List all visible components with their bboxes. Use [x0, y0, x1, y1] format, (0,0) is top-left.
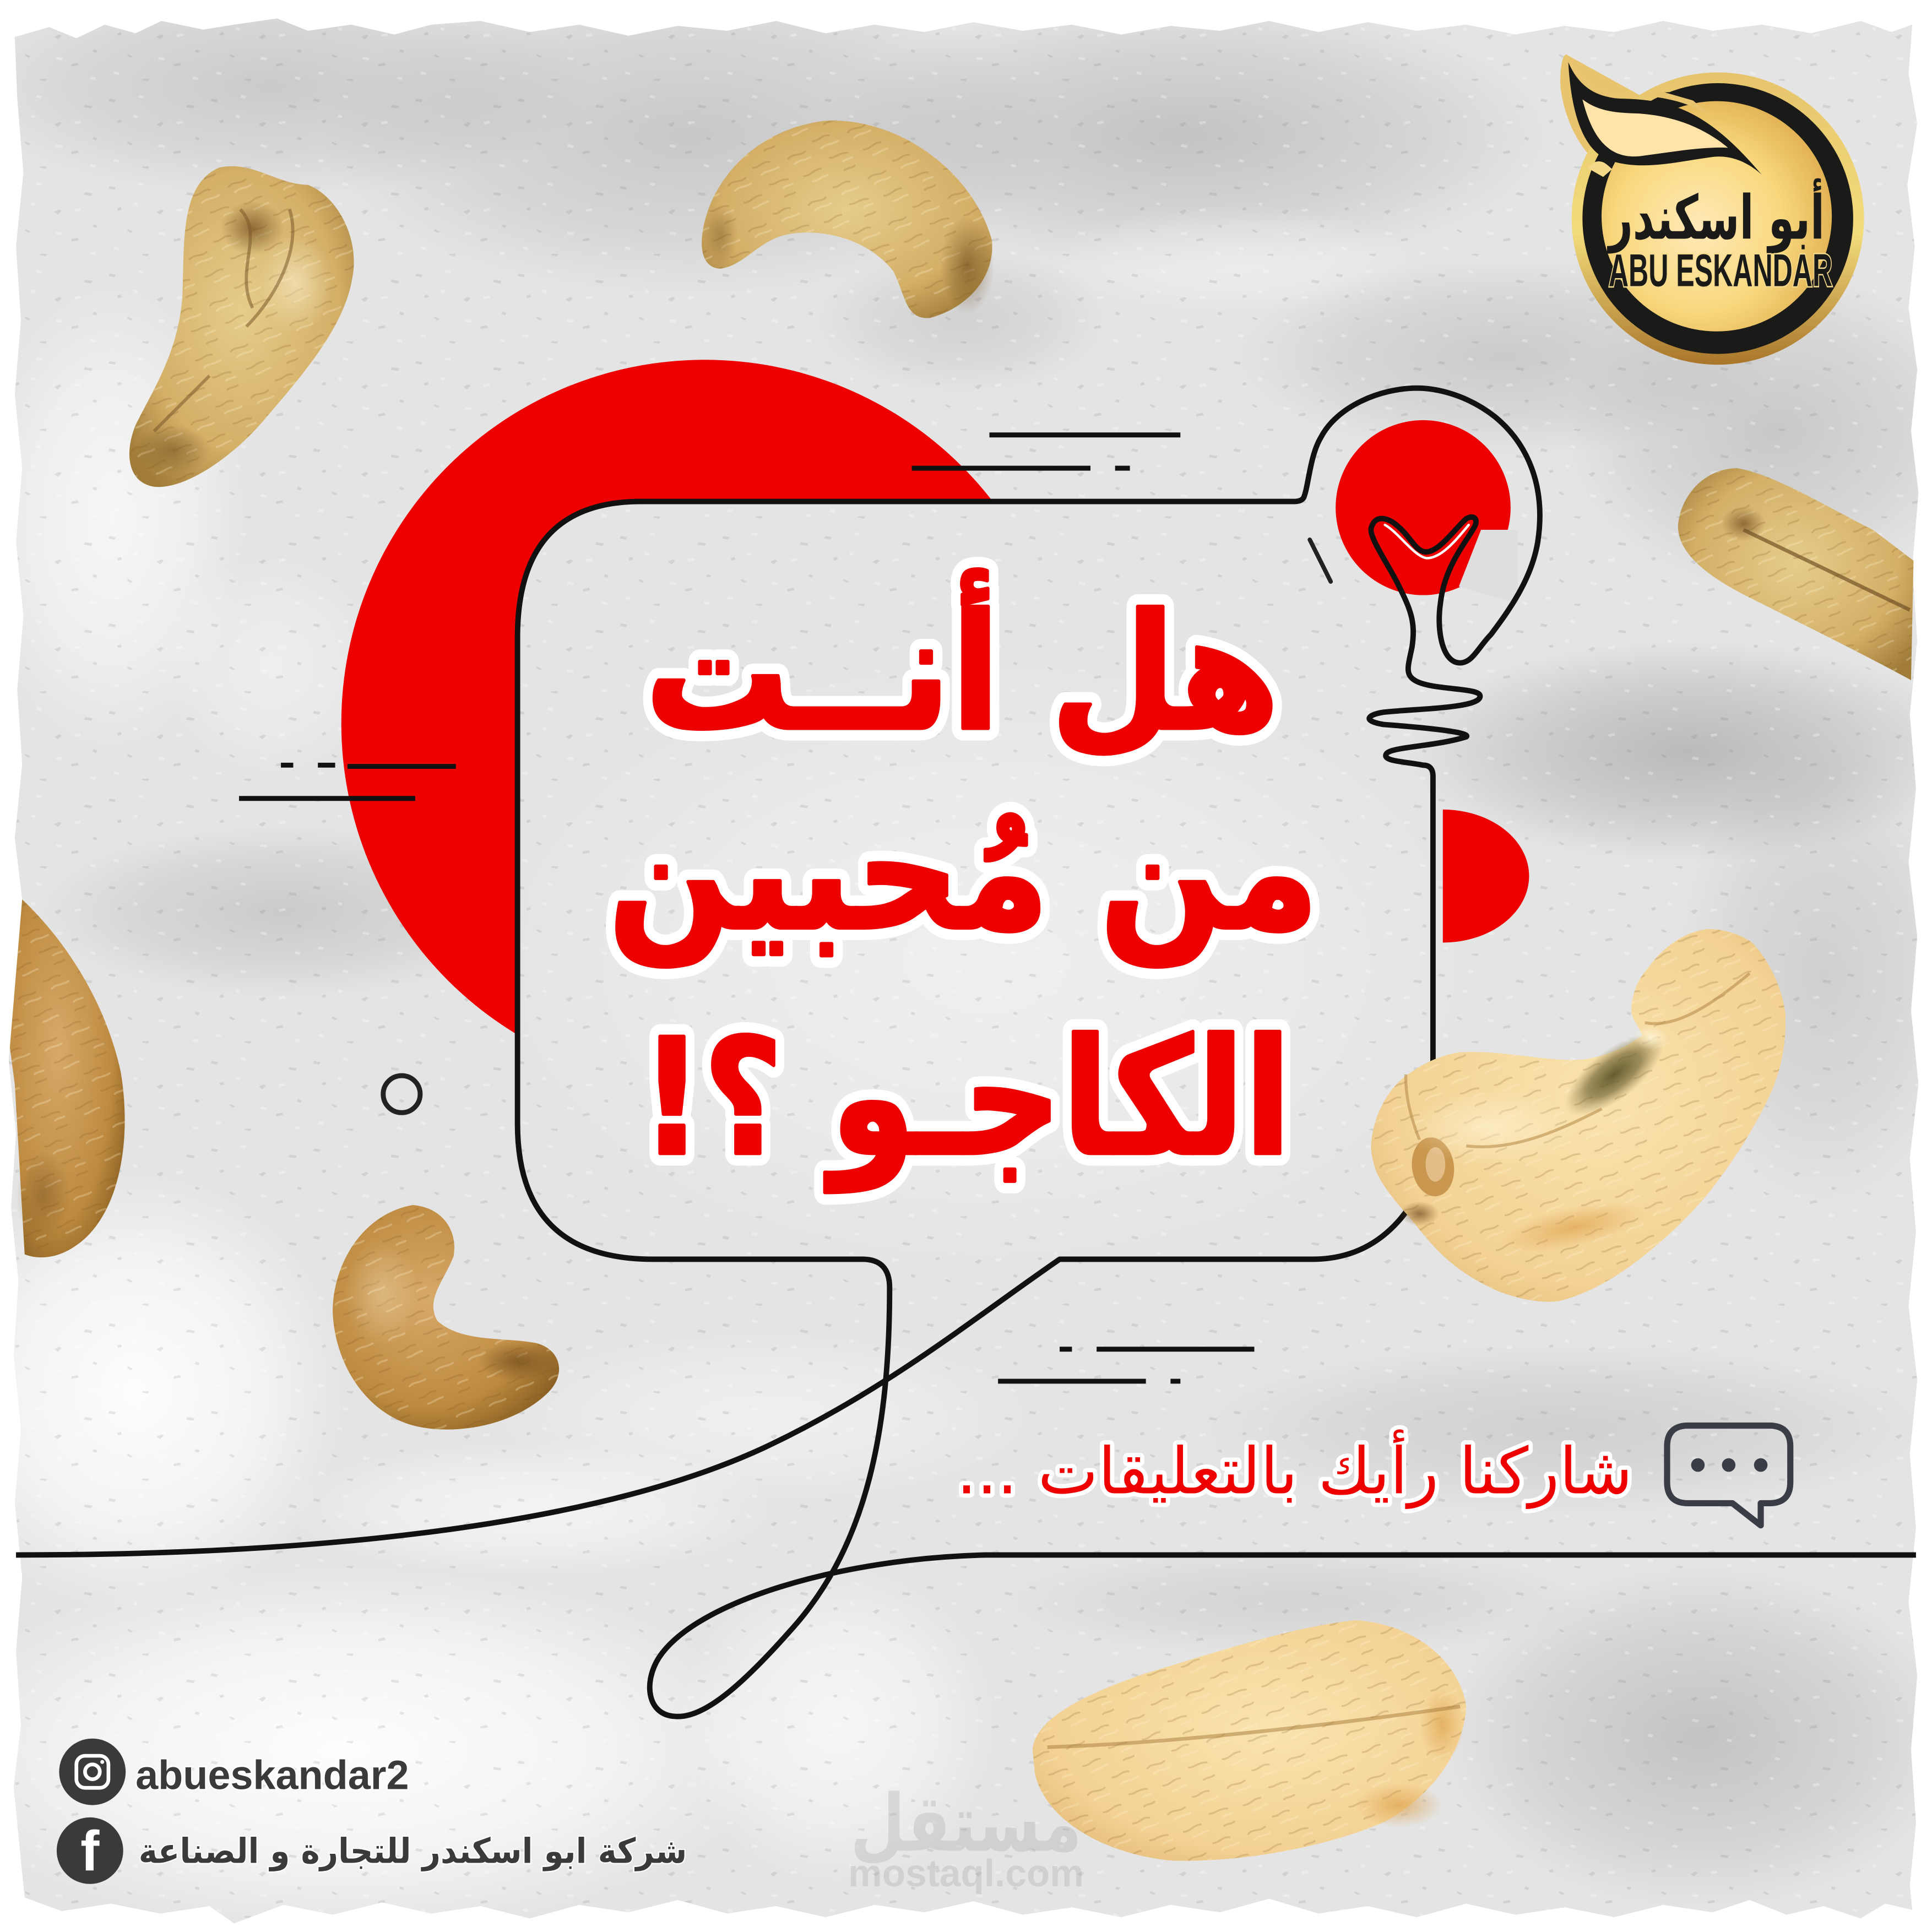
- icon: facebook: [57, 1817, 123, 1884]
- bulb glow tick and filament highlight: [1310, 525, 1469, 582]
- red half circle: [1443, 810, 1529, 942]
- logo leaf rim: [1560, 55, 1765, 177]
- icon: instagram: [59, 1739, 126, 1805]
- title line 1: هل أنــت: [645, 568, 1279, 766]
- decorative dashes: left: [239, 765, 456, 799]
- title line 2: من مُحبين: [608, 779, 1319, 968]
- logo gold centre: [1602, 101, 1832, 332]
- watermark latin: mostaql.com: [848, 1852, 1084, 1895]
- instagram handle row: [59, 1739, 409, 1805]
- title line 1: هل أنــت: [645, 568, 1279, 766]
- logo rim: [1572, 72, 1864, 365]
- big red circle behind speech bubble: [341, 360, 991, 1033]
- logo ring: [1582, 83, 1853, 354]
- title line 3: الكاجـو ؟!: [641, 1005, 1291, 1193]
- title line 2: من مُحبين: [608, 779, 1319, 968]
- cashew: left edge: [10, 899, 125, 1257]
- facebook page name: شركة ابو اسكندر للتجارة و الصناعة: [139, 1831, 687, 1872]
- cashew: lower left: [333, 1205, 559, 1430]
- cashew: top centre: [702, 121, 994, 318]
- small ring: [383, 1076, 420, 1112]
- title line 3: الكاجـو ؟!: [641, 1005, 1291, 1193]
- call to action text: شاركنا رأيك بالتعليقات ...: [957, 1430, 1632, 1509]
- main title: [608, 568, 1319, 1193]
- cashew: top left: [129, 166, 354, 487]
- one-line drawing: speech bubble, light bulb and ground line: [16, 388, 1916, 1717]
- icon: facebook: f: [80, 1819, 100, 1882]
- cashew: large right: [1371, 929, 1786, 1302]
- cashew: right edge: [1678, 468, 1913, 680]
- cashew: bottom: [1033, 1620, 1466, 1861]
- icon: comment bubble: [1667, 1425, 1790, 1526]
- logo: Abu Eskandar: [1560, 55, 1864, 365]
- decorative dashes: bottom: [998, 1349, 1255, 1381]
- watermark: [848, 1777, 1084, 1895]
- instagram handle text: abueskandar2: [135, 1752, 409, 1798]
- decorative dashes: top: [912, 435, 1180, 468]
- logo leaf: [1566, 55, 1762, 177]
- logo arabic name: أبو اسكندر: [1607, 178, 1825, 254]
- bulb red circle: [1336, 420, 1518, 604]
- watermark arabic: مستقل: [850, 1777, 1082, 1869]
- facebook page row: [57, 1817, 687, 1884]
